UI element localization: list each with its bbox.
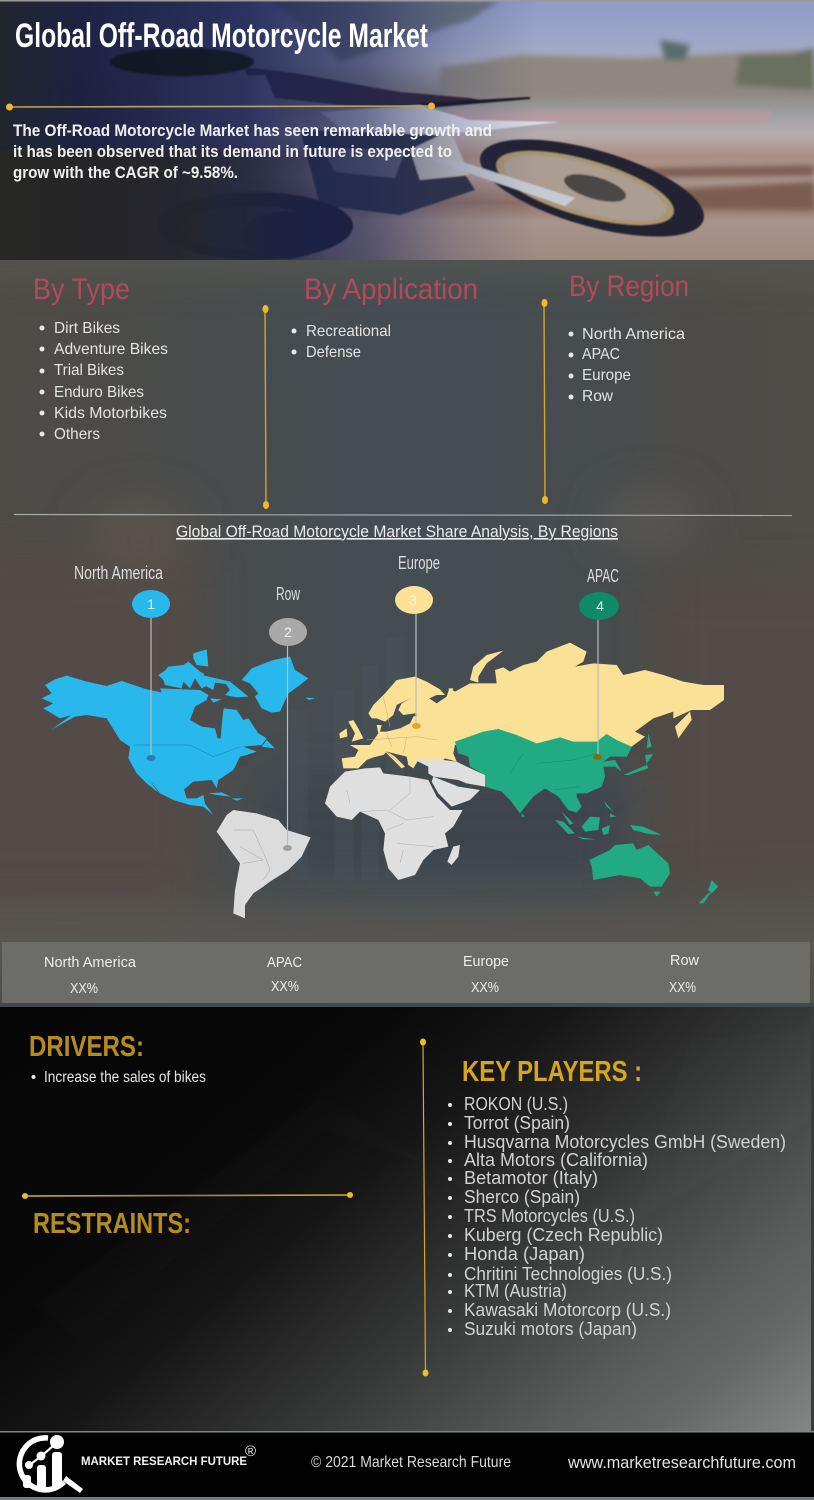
list: region items: Europe [582, 367, 631, 384]
label: Row: Row [276, 584, 301, 604]
share: North America: XX% [70, 980, 98, 997]
heading: market share analysis: Global Off-Road Motorcycle Market Share Analysis, By Regions [176, 523, 618, 541]
share: APAC [267, 954, 302, 995]
list: key players: KTM (Austria) [464, 1281, 567, 1301]
title: Global Off-Road Motorcycle Market [15, 17, 428, 55]
list: key players: Kuberg (Czech Republic) [464, 1225, 663, 1245]
heading: key players: KEY PLAYERS : [462, 1056, 642, 1088]
map pin 3: Europe [395, 553, 440, 729]
map pin 3: Europe: 3 [409, 592, 417, 608]
map pin 2: Row [269, 584, 307, 851]
list: application items [292, 323, 391, 361]
map region: Asia Pacific [455, 729, 718, 903]
label: North America: North America [74, 563, 164, 583]
list: key players: Honda (Japan) [464, 1244, 585, 1264]
heading: restraints: RESTRAINTS: [33, 1208, 191, 1240]
heading: by application: By Application [304, 273, 478, 306]
text: copyright: © 2021 Market Research Future [311, 1454, 511, 1471]
share: APAC: XX% [271, 978, 299, 995]
list: type items: Dirt Bikes [54, 320, 120, 337]
front wheel [479, 138, 705, 238]
list: key players: ROKON (U.S.) [464, 1094, 568, 1114]
list: key players: TRS Motorcycles (U.S.) [464, 1206, 635, 1226]
map: Americas [42, 649, 315, 918]
share: Row: Row [670, 952, 699, 969]
heading: by region: By Region [569, 270, 689, 303]
share: Europe: Europe [463, 953, 509, 970]
panel: by type [33, 273, 168, 443]
map pin 2: Row: 2 [284, 624, 292, 640]
list: type items: Kids Motorbikes [54, 405, 167, 422]
list: key players: Torrot (Spain) [464, 1113, 570, 1133]
map region: North America [42, 649, 315, 815]
text: website: www.marketresearchfuture.com [567, 1454, 796, 1472]
text: market introduction: grow with the CAGR of ~9.58%. [13, 164, 238, 182]
text: market introduction [13, 122, 492, 182]
list: type items: Adventure Bikes [54, 341, 168, 358]
heading: by type: By Type [33, 273, 130, 306]
list: key players: Chritini Technologies (U.S.) [464, 1264, 672, 1284]
panel: drivers, restraints and key players [0, 1007, 811, 1432]
share: Europe: XX% [471, 979, 499, 996]
list: key players: Betamotor (Italy) [464, 1168, 598, 1188]
label: APAC: APAC [587, 566, 619, 586]
list: region items [568, 326, 685, 405]
share: Row: XX% [669, 979, 696, 996]
share: North America: North America [44, 954, 137, 971]
panel: by region [568, 270, 689, 405]
engine and frame [300, 130, 475, 215]
panel: regional share strip [0, 942, 814, 1007]
helmet [110, 48, 254, 76]
list: key players: Husqvarna Motorcycles GmbH (Sweden) [464, 1132, 786, 1152]
list: type items [40, 320, 168, 443]
map pin 4: APAC: 4 [596, 598, 604, 614]
text: market introduction: it has been observed that its demand in future is expected to [13, 143, 452, 161]
heading: drivers: DRIVERS: [29, 1031, 144, 1063]
map region: South America [217, 810, 311, 918]
text: registered mark: ® [245, 1443, 256, 1460]
list: region items: North America [582, 326, 685, 343]
rear wheel [229, 192, 354, 260]
label: Europe: Europe [398, 553, 440, 573]
panel: by application [292, 273, 478, 361]
text: driver item: Increase the sales of bikes [44, 1069, 206, 1086]
share: North America [44, 954, 137, 997]
text: market introduction: The Off-Road Motorcycle Market has seen remarkable growth and [13, 122, 492, 140]
text: brand name: MARKET RESEARCH FUTURE [81, 1454, 247, 1468]
list: type items: Trial Bikes [54, 362, 124, 379]
share: APAC: APAC [267, 954, 302, 971]
list: key players [448, 1094, 786, 1339]
share: Row [669, 952, 699, 996]
list: key players: Sherco (Spain) [464, 1187, 580, 1207]
panel: hero photo banner [0, 0, 814, 260]
world map [42, 643, 724, 918]
map region: Africa and Middle East [325, 760, 485, 880]
panel: footer [0, 1431, 814, 1500]
share: Europe [463, 953, 509, 996]
fork [430, 158, 575, 206]
map region: Europe and Russia [339, 643, 724, 768]
rider arm and handlebar [245, 68, 492, 108]
panel: segmentation and map background [0, 240, 814, 1005]
list: region items: APAC [582, 346, 620, 363]
list: type items: Enduro Bikes [54, 384, 144, 401]
list: key players: Kawasaki Motorcorp (U.S.) [464, 1300, 671, 1320]
map pin 4: APAC [579, 566, 619, 760]
list: region items: Row [582, 388, 613, 405]
divider: hero gold rule [6, 102, 435, 110]
list: application items: Recreational [306, 323, 391, 340]
map pin 1: North America: 1 [147, 596, 155, 612]
map pin 1: North America [74, 563, 170, 761]
icon: market research future logo [19, 1435, 83, 1493]
map: Europe, Asia, Africa, Oceania [325, 643, 724, 903]
list: key players: Suzuki motors (Japan) [464, 1319, 637, 1339]
fairing [320, 105, 560, 135]
list: type items: Others [54, 426, 100, 443]
list: application items: Defense [306, 344, 361, 361]
list: key players: Alta Motors (California) [464, 1150, 648, 1170]
jersey [246, 74, 275, 99]
